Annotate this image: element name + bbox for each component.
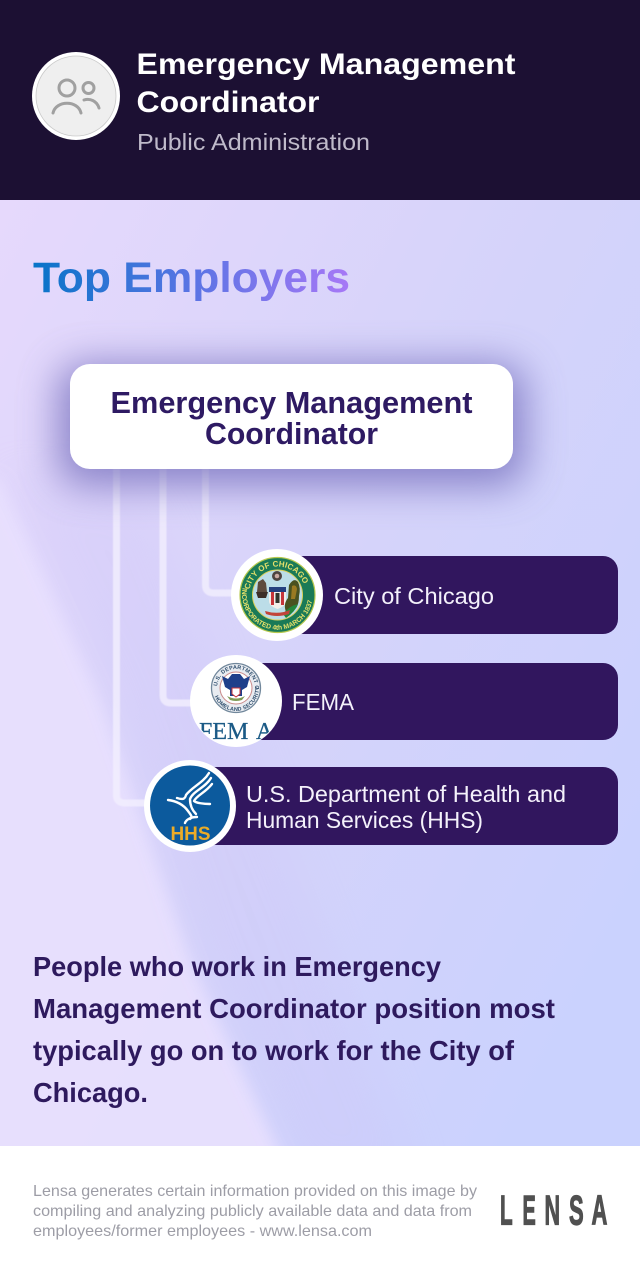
logo: LENSA bbox=[500, 1187, 607, 1235]
logo: City of Chicago seal: INCORPORATED 4th MARCH 1837 bbox=[242, 588, 312, 630]
summary text: People who work in Emergency bbox=[33, 951, 441, 982]
header band bbox=[0, 0, 640, 200]
logo: City of Chicago seal bbox=[231, 549, 323, 641]
logo: City of Chicago seal: CITY OF CHICAGO bbox=[244, 561, 308, 589]
section heading: Top Employers bbox=[33, 254, 350, 302]
header subtitle: Public Administration bbox=[137, 129, 370, 155]
root card: Emergency Management bbox=[110, 385, 472, 420]
disclaimer text: Lensa generates certain information provided on this image by bbox=[33, 1183, 477, 1200]
summary text bbox=[33, 951, 555, 1108]
employer: U.S. Department of Health and Human Services (HHS): U.S. Department of Health and bbox=[246, 781, 566, 807]
disclaimer text bbox=[33, 1183, 477, 1240]
employer: FEMA bbox=[190, 655, 618, 747]
seal: figure and foliage bbox=[285, 580, 300, 612]
logo: LENSA: A bbox=[592, 1188, 607, 1234]
logo: LENSA: L bbox=[500, 1187, 513, 1233]
root card bbox=[70, 364, 513, 469]
header title: Emergency Management bbox=[136, 48, 516, 81]
logo: FEMA bbox=[190, 655, 282, 747]
header title bbox=[136, 48, 516, 119]
logo: FEMA: HOMELAND SECURITY bbox=[214, 686, 260, 711]
disclaimer text: employees/former employees - www.lensa.com bbox=[33, 1223, 372, 1240]
seal: land and scroll bbox=[283, 604, 298, 618]
summary text: Chicago. bbox=[33, 1077, 148, 1108]
logo: HHS bbox=[144, 760, 236, 852]
card shadow bbox=[58, 364, 525, 486]
connector lines bbox=[116, 460, 236, 803]
logo: LENSA: E bbox=[522, 1188, 536, 1233]
seal: ship bbox=[257, 579, 267, 592]
employer: City of Chicago: City of Chicago bbox=[334, 583, 494, 609]
disclaimer text: compiling and analyzing publicly available data and data from bbox=[33, 1203, 472, 1220]
employer: FEMA: FEMA bbox=[292, 689, 355, 715]
logo: FEMA: A bbox=[256, 719, 274, 745]
employer: U.S. Department of Health and Human Services (HHS) bbox=[144, 760, 618, 852]
org chart bbox=[32, 338, 618, 852]
footer bbox=[0, 1146, 640, 1274]
logo: HHS: HHS bbox=[170, 824, 210, 845]
summary text: typically go on to work for the City of bbox=[33, 1035, 515, 1066]
logo: FEMA: FEM bbox=[199, 719, 248, 745]
header title: Coordinator bbox=[136, 86, 320, 119]
logo: FEMA: U.S. DEPARTMENT OF bbox=[213, 665, 259, 690]
background gradient panel bbox=[0, 200, 640, 1180]
avatar icon: people bbox=[32, 52, 120, 140]
summary text: Management Coordinator position most bbox=[33, 993, 555, 1024]
logo: LENSA: S bbox=[569, 1188, 584, 1234]
employer: City of Chicago bbox=[231, 549, 618, 641]
employer: U.S. Department of Health and Human Services (HHS): Human Services (HHS) bbox=[246, 807, 483, 833]
root card: Coordinator bbox=[205, 416, 378, 451]
seal: shield bbox=[269, 587, 286, 609]
seal: infant head bbox=[272, 571, 282, 581]
logo: LENSA: N bbox=[544, 1188, 560, 1235]
